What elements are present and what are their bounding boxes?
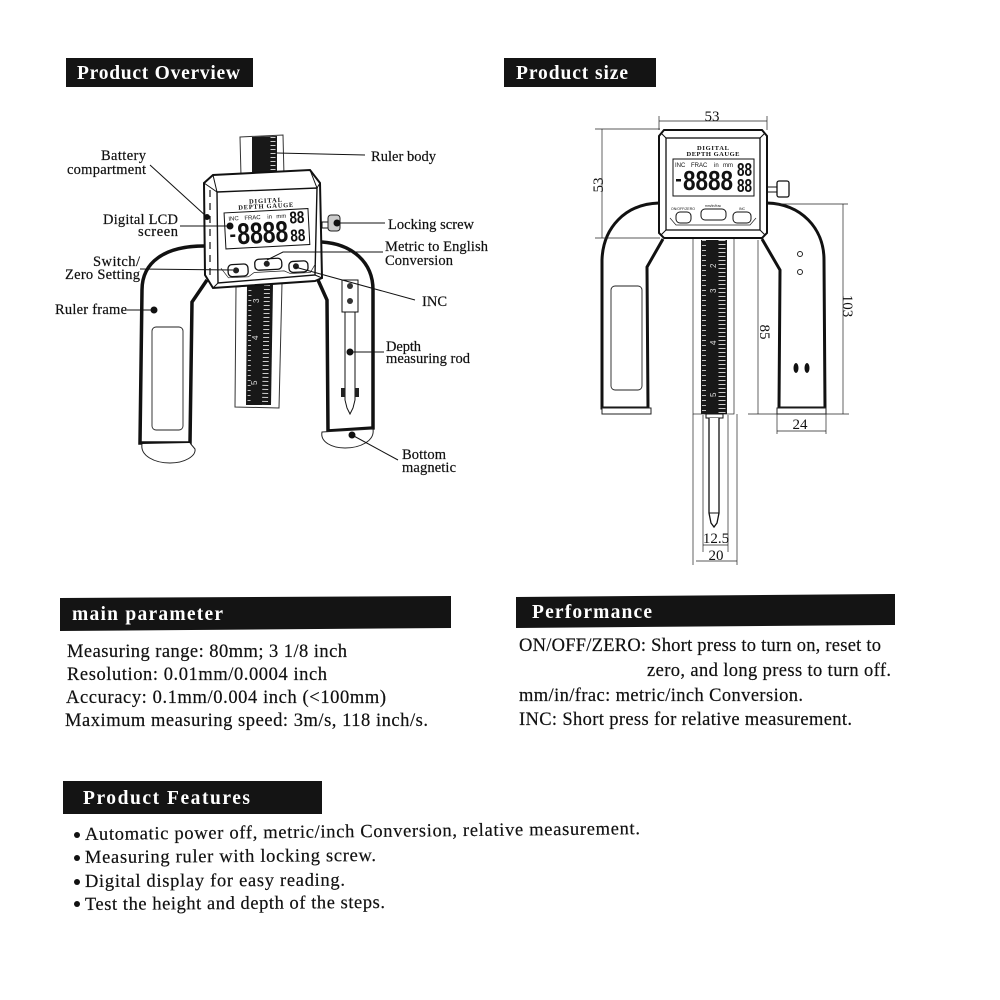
dimension values: 53 — [591, 178, 607, 192]
gauge body: DIGITAL — [697, 145, 730, 152]
performance list: ON/OFF/ZERO: Short press to turn on, reset to — [519, 636, 881, 656]
parameter list — [65, 642, 428, 731]
parameter list: Resolution: 0.01mm/0.0004 inch — [67, 665, 327, 685]
dimension values: 12.5 — [703, 531, 729, 547]
gauge body: mm — [723, 163, 733, 169]
ruler: 4 — [709, 340, 718, 345]
depth measuring rod — [341, 280, 359, 414]
panel: product features — [63, 781, 640, 915]
depth rod — [706, 414, 723, 527]
parameter list: Maximum measuring speed: 3m/s, 118 inch/s. — [65, 711, 428, 731]
LCD screen and buttons: FRAC — [244, 215, 262, 222]
gauge body: 8888 — [683, 165, 733, 196]
locking screw — [322, 215, 340, 231]
heading: Product size — [504, 58, 656, 87]
ruler: 2 — [709, 263, 718, 268]
labels: INC — [422, 294, 447, 310]
feature list: Test the height and depth of the steps. — [85, 893, 385, 915]
labels: Ruler frame — [55, 302, 127, 318]
gauge body — [659, 130, 767, 238]
labels — [55, 148, 489, 476]
feature list: Automatic power off, metric/inch Conversion, relative measurement. — [85, 819, 640, 845]
labels: measuring rod — [386, 351, 471, 367]
performance list: INC: Short press for relative measurement. — [519, 710, 852, 730]
heading: Product size: Product size — [516, 63, 628, 84]
diagram: product overview — [55, 135, 489, 476]
dimension values: 20 — [708, 548, 724, 564]
LCD screen and buttons: in — [267, 214, 272, 221]
left frame — [602, 203, 663, 414]
LCD screen and buttons: DEPTH GAUGE — [238, 202, 293, 212]
heading: Product Overview — [66, 58, 253, 87]
ruler: 3 — [709, 288, 718, 293]
parameter list: Accuracy: 0.1mm/0.004 inch (<100mm) — [66, 688, 386, 708]
labels: Conversion — [385, 253, 454, 269]
gauge body: INC — [675, 163, 686, 169]
dimension values — [591, 109, 855, 564]
LCD screen and buttons: DIGITAL — [249, 197, 283, 206]
labels: Battery — [101, 148, 147, 164]
gauge body: 88 — [737, 176, 752, 196]
gauge body: ON/OFF/ZERO — [671, 207, 695, 211]
panel: performance — [516, 594, 895, 730]
heading: Performance — [532, 602, 652, 623]
ruler: 5 — [709, 392, 718, 397]
heading: main parameter — [72, 604, 223, 625]
LCD screen and buttons: INC — [228, 216, 240, 223]
LCD screen and buttons — [217, 195, 316, 278]
locking screw — [767, 181, 789, 197]
ruler: 5 — [250, 380, 259, 385]
ruler — [693, 238, 734, 414]
gauge body: DEPTH GAUGE — [686, 151, 740, 158]
gauge body: in — [714, 163, 719, 169]
ruler frame right arm — [318, 242, 373, 448]
gauge body: 88 — [737, 160, 752, 180]
labels: Zero Setting — [65, 267, 140, 283]
diagram: product size — [591, 109, 855, 565]
performance list: zero, and long press to turn off. — [647, 661, 891, 681]
parameter list: Measuring range: 80mm; 3 1/8 inch — [67, 642, 347, 662]
gauge body: INC — [739, 207, 745, 211]
heading — [516, 594, 895, 628]
ruler frame left arm — [140, 246, 207, 463]
LCD screen and buttons: 88 — [289, 208, 305, 228]
gauge body: mm/in/frac — [705, 204, 721, 208]
panel: main parameter — [60, 596, 451, 731]
dimension values: 53 — [704, 109, 720, 125]
heading — [63, 781, 322, 814]
callout leader lines — [127, 153, 415, 460]
labels: Metric to English — [385, 239, 489, 255]
labels: compartment — [67, 162, 146, 178]
labels: screen — [138, 224, 179, 240]
labels: Depth — [386, 339, 422, 355]
labels: Bottom — [402, 447, 447, 463]
feature list: Measuring ruler with locking screw. — [85, 846, 376, 868]
labels: Digital LCD — [103, 212, 178, 228]
LCD screen and buttons: 88 — [290, 226, 306, 246]
gauge body: FRAC — [691, 163, 708, 169]
labels: Switch/ — [93, 254, 141, 270]
body — [204, 170, 322, 288]
performance list: mm/in/frac: metric/inch Conversion. — [519, 686, 803, 706]
labels: Ruler body — [371, 149, 437, 165]
feature list — [74, 819, 640, 915]
right frame — [762, 203, 826, 414]
labels: Locking screw — [388, 217, 475, 233]
heading — [60, 596, 451, 631]
ruler: 4 — [251, 335, 260, 340]
dimension values: 24 — [792, 417, 808, 433]
ruler — [235, 135, 284, 408]
performance list — [519, 636, 891, 730]
feature list: Digital display for easy reading. — [85, 871, 345, 892]
dimension values: 85 — [756, 324, 772, 340]
heading: Product Features — [83, 788, 250, 809]
labels: magnetic — [402, 460, 456, 476]
LCD screen and buttons: 8888 — [236, 216, 289, 251]
dimension values: 103 — [839, 295, 855, 317]
ruler: 3 — [252, 298, 261, 303]
dimension lines — [595, 116, 849, 565]
LCD screen and buttons: mm — [276, 214, 286, 220]
heading: Product Overview: Product Overview — [77, 63, 240, 84]
